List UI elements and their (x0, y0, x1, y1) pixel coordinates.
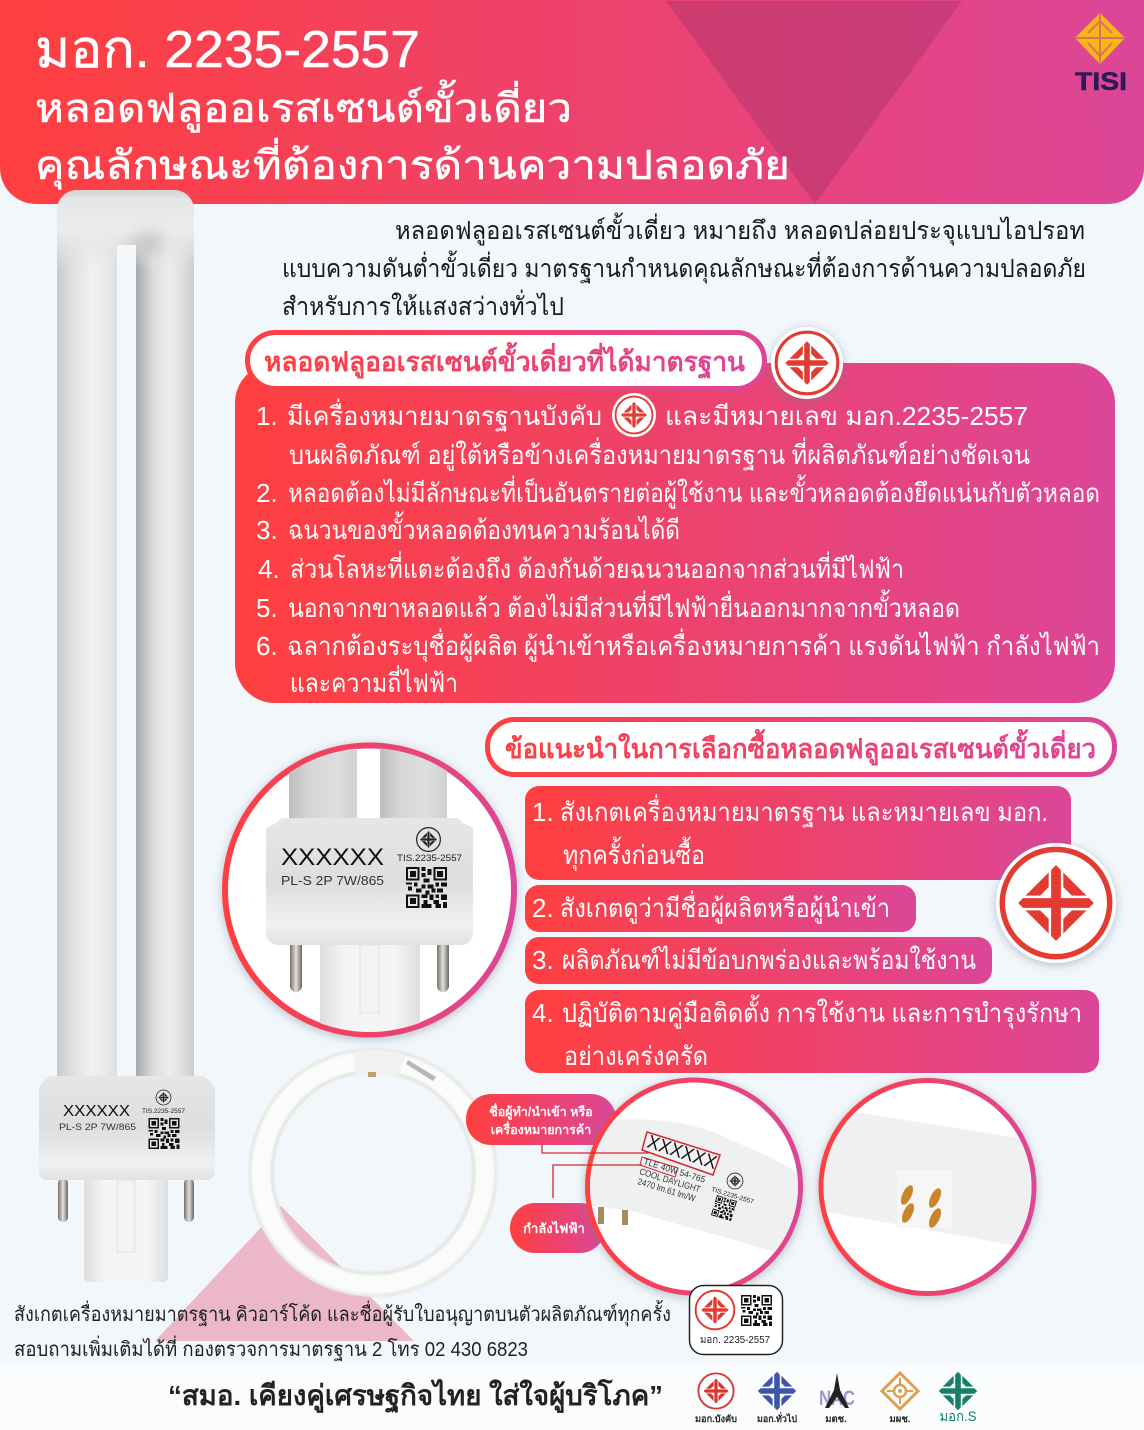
requirement list: 4. (258, 554, 280, 584)
QR and mark box (690, 1286, 782, 1354)
intro paragraph: หลอดฟลูออเรสเซนต์ขั้วเดี่ยว หมายถึง หลอดปล่อยประจุแบบไอปรอท (395, 212, 1085, 246)
icon: standard mark badge (771, 327, 843, 399)
connector lines (542, 1145, 648, 1198)
title: มอก. 2235-2557 (35, 21, 420, 79)
tube label text: XXXXXX (644, 1132, 720, 1174)
requirement list: ฉลากต้องระบุชื่อผู้ผลิต ผู้นำเข้าหรือเครื่องหมายการค้า แรงดันไฟฟ้า กำลังไฟฟ้า (287, 628, 1100, 662)
pink triangle decoration (155, 1206, 414, 1341)
advice 2: สังเกตดูว่ามีชื่อผู้ผลิตหรือผู้นำเข้า (560, 890, 890, 924)
notice text: สอบถามเพิ่มเติมได้ที่ กองตรวจการมาตรฐาน 2 โทร 02 430 6823 (14, 1335, 528, 1361)
panel heading (248, 332, 764, 388)
requirement list: 5. (256, 593, 278, 623)
advice 1: 1. (532, 797, 554, 827)
logo: S standard (939, 1372, 977, 1424)
requirement list: 3. (256, 515, 278, 545)
callout: manufacturer name (466, 1094, 616, 1145)
panel heading: หลอดฟลูออเรสเซนต์ขั้วเดี่ยวที่ได้มาตรฐาน (264, 341, 746, 380)
intro paragraph (282, 212, 1086, 321)
advice 4: อย่างเคร่งครัด (564, 1041, 708, 1071)
cap label: XXXXXX (281, 844, 384, 871)
slogan: “สมอ. เคียงคู่เศรษฐกิจไทย ใส่ใจผู้บริโภค” (168, 1378, 663, 1414)
cap label: PL-S 2P 7W/865 (281, 873, 384, 888)
advice 3 (525, 937, 992, 984)
logo: TISI (1075, 13, 1127, 96)
advice 1 (525, 786, 1071, 880)
requirement list: นอกจากขาหลอดแล้ว ต้องไม่มีส่วนที่มีไฟฟ้ายื่นออกมากจากขั้วหลอด (288, 589, 960, 623)
tube label text (636, 1132, 720, 1204)
advice 3: ผลิตภัณฑ์ไม่มีข้อบกพร่องและพร้อมใช้งาน (562, 945, 976, 975)
requirement list: บนผลิตภัณฑ์ อยู่ใต้หรือข้างเครื่องหมายมาตรฐาน ที่ผลิตภัณฑ์อย่างชัดเจน (289, 437, 1030, 471)
heading: buying advice: ข้อแนะนำในการเลือกซื้อหลอดฟลูออเรสเซนต์ขั้วเดี่ยว (505, 728, 1096, 766)
requirement list: 1. (256, 401, 278, 431)
advice 1: ทุกครั้งก่อนซื้อ (563, 836, 705, 871)
notice text (14, 1300, 671, 1361)
subtitle line 2: คุณลักษณะที่ต้องการด้านความปลอดภัย (35, 138, 790, 190)
logo: mandatory standard: มอก.บังคับ (695, 1414, 737, 1425)
advice list (525, 786, 1099, 1073)
intro paragraph: แบบความดันต่ำขั้วเดี่ยว มาตรฐานกำหนดคุณลักษณะที่ต้องการด้านความปลอดภัย (282, 250, 1086, 284)
tube label text: TLE 40W 54-765 (642, 1156, 707, 1185)
advice 4 (525, 990, 1099, 1073)
panel: standard lamp requirements (235, 327, 1115, 703)
callout: manufacturer name: เครื่องหมายการค้า (491, 1121, 591, 1137)
advice 3: 3. (532, 945, 554, 975)
icon: large standard mark (996, 843, 1116, 963)
cap label: TIS.2235-2557 (397, 853, 462, 863)
advice 2: 2. (532, 893, 554, 923)
advice 4: 4. (532, 998, 554, 1028)
requirement list: มีเครื่องหมายมาตรฐานบังคับ (287, 398, 602, 432)
logo: national standard tower (819, 1373, 855, 1425)
subtitle line 1: หลอดฟลูออเรสเซนต์ขั้วเดี่ยว (35, 79, 572, 132)
callout: wattage: กำลังไฟฟ้า (523, 1220, 585, 1236)
logo: community product standard: มผช. (890, 1414, 910, 1425)
lamp illustration (39, 190, 215, 1282)
circular fluorescent lamp (250, 1050, 496, 1296)
header banner (0, 0, 1144, 204)
callout: manufacturer name: ชื่อผู้ทำ/นำเข้า หรือ (489, 1103, 593, 1120)
tube label text: 2470 lm.61 lm/W (636, 1176, 697, 1204)
logo: community product standard (882, 1373, 918, 1425)
advice 1: สังเกตเครื่องหมายมาตรฐาน และหมายเลข มอก. (560, 794, 1048, 828)
lamp label (59, 1090, 186, 1149)
circle: circular lamp label close-up (585, 1080, 805, 1293)
logo row (695, 1372, 977, 1425)
logo: TISI: TISI (1075, 68, 1127, 96)
logo: national standard tower: มตช. (825, 1414, 847, 1425)
circle: lamp cap close-up (225, 740, 514, 1040)
intro paragraph: สำหรับการให้แสงสว่างทั่วไป (282, 289, 564, 321)
cap label (281, 828, 462, 908)
requirement list: และความถี่ไฟฟ้า (290, 665, 458, 698)
lamp label: XXXXXX (63, 1103, 130, 1120)
advice 4: ปฏิบัติตามคู่มือติดตั้ง การใช้งาน และการบำรุงรักษา (562, 994, 1082, 1029)
lamp label: PL-S 2P 7W/865 (59, 1122, 136, 1133)
notice text: สังเกตเครื่องหมายมาตรฐาน คิวอาร์โค้ด และชื่อผู้รับใบอนุญาตบนตัวผลิตภัณฑ์ทุกครั้ง (14, 1300, 671, 1327)
requirement list (256, 393, 1100, 698)
callout: wattage (510, 1203, 605, 1253)
requirement list: ฉนวนของขั้วหลอดต้องทนความร้อนได้ดี (288, 511, 680, 545)
requirement list: 2. (256, 478, 278, 508)
lamp label: TIS.2235-2557 (142, 1109, 186, 1115)
tube label text: COOL DAYLIGHT (638, 1166, 702, 1194)
requirement list: ส่วนโลหะที่แตะต้องถึง ต้องกันด้วยฉนวนออกจากส่วนที่มีไฟฟ้า (290, 551, 904, 584)
logo: mandatory standard (695, 1373, 737, 1425)
circle: circular lamp label close-up: TIS.2235-2557 (710, 1186, 755, 1206)
logo: S standard: มอก.S (940, 1408, 976, 1424)
logo: general standard (757, 1372, 797, 1425)
logo: national standard tower: NAC (819, 1387, 855, 1410)
circle: lamp contact pins close-up (815, 1080, 1040, 1294)
requirement list: 6. (256, 631, 278, 661)
heading: buying advice (488, 720, 1114, 774)
footer strip background (0, 1363, 1144, 1430)
logo: general standard: มอก.ทั่วไป (757, 1411, 797, 1425)
advice 2 (525, 885, 916, 932)
requirement list: และมีหมายเลข มอก.2235-2557 (665, 401, 1028, 431)
QR and mark box: มอก. 2235-2557 (700, 1335, 770, 1346)
